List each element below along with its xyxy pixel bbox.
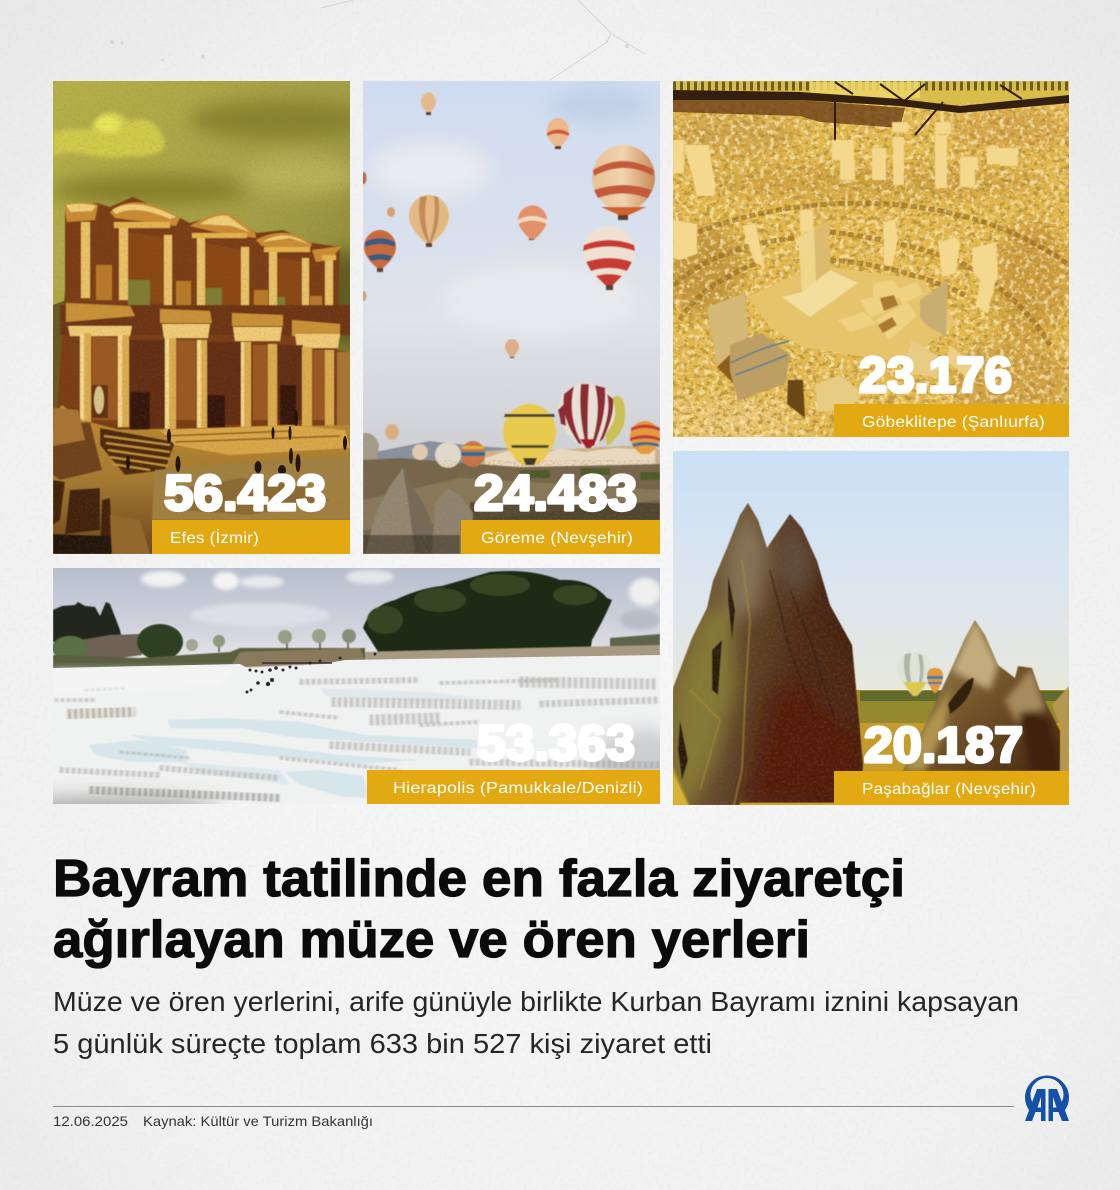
panel: Efes <box>53 81 350 554</box>
label bar: Paşabağlar (Nevşehir): Paşabağlar (Nevşehir) <box>862 781 1036 798</box>
label bar: Göbeklitepe (Şanlıurfa) <box>834 404 1069 437</box>
photo: Pamukkale travertines <box>53 568 660 804</box>
title <box>53 850 905 969</box>
sky balloons <box>362 92 655 358</box>
panel: Hierapolis <box>0 568 690 824</box>
visitors <box>126 410 347 475</box>
middle entablature <box>60 305 350 335</box>
subtitle <box>53 986 1019 1059</box>
stones <box>673 122 1018 418</box>
lower columns <box>80 333 334 430</box>
source: Kaynak: Kültür ve Turizm Bakanlığı <box>143 1113 373 1129</box>
label: Göbeklitepe value: 23.176 <box>859 347 1012 403</box>
upper storey bays <box>128 232 302 305</box>
label: Paşabağlar value: 20.187 <box>864 717 1023 773</box>
subtitle: Müze ve ören yerlerini, arife günüyle birlikte Kurban Bayramı iznini kapsayan <box>53 986 1019 1017</box>
label bar: Paşabağlar (Nevşehir) <box>834 771 1069 805</box>
icon: AA logo <box>1025 1075 1069 1121</box>
right rock <box>903 620 1063 772</box>
label bar: Hierapolis (Pamukkale/Denizli): Hierapolis (Pamukkale/Denizli) <box>393 780 643 797</box>
label bar: Efes (İzmir) <box>152 520 350 554</box>
label: Efes value: 56.423 <box>164 465 326 521</box>
subtitle: 5 günlük süreçte toplam 633 bin 527 kişi ziyaret etti <box>53 1028 712 1059</box>
photo: excavation site <box>660 81 1070 442</box>
visitors <box>246 652 376 694</box>
photo: Library of Celsus <box>53 81 350 554</box>
landscape <box>363 433 660 554</box>
label bar: Hierapolis (Pamukkale/Denizli) <box>367 770 660 804</box>
big rock <box>673 503 865 805</box>
floor <box>748 267 957 363</box>
panel: Göreme <box>362 81 660 554</box>
edge rock <box>1052 686 1069 771</box>
photo: hot air balloons <box>362 81 660 554</box>
panel: Göbeklitepe <box>660 81 1070 442</box>
label bar: Göreme (Nevşehir) <box>461 520 660 554</box>
title: ağırlayan müze ve ören yerleri <box>53 911 810 969</box>
upper columns <box>80 221 334 306</box>
title: Bayram tatilinde en fazla ziyaretçi <box>53 850 905 908</box>
label bar: Efes (İzmir): Efes (İzmir) <box>170 529 259 547</box>
footer rule <box>53 1106 1014 1107</box>
horizon balloons <box>385 382 660 468</box>
label bar: Göbeklitepe (Şanlıurfa): Göbeklitepe (Şanlıurfa) <box>862 414 1045 431</box>
walkway <box>673 81 1069 103</box>
label: Göreme value: 24.483 <box>474 465 637 521</box>
trench walls <box>673 203 1069 345</box>
travertine base <box>53 655 660 672</box>
photo: fairy chimneys <box>673 451 1070 805</box>
label bar: Göreme (Nevşehir): Göreme (Nevşehir) <box>481 530 633 547</box>
panel: Paşabağlar <box>673 451 1070 805</box>
pools <box>89 688 480 798</box>
lower bays <box>92 336 325 420</box>
label: Hierapolis value: 53.363 <box>477 715 635 771</box>
bottom vignette <box>53 724 660 804</box>
terrace faces <box>55 680 660 798</box>
date: 12.06.2025 <box>53 1113 128 1129</box>
foreground <box>53 405 350 554</box>
rubble grain <box>673 100 1069 437</box>
